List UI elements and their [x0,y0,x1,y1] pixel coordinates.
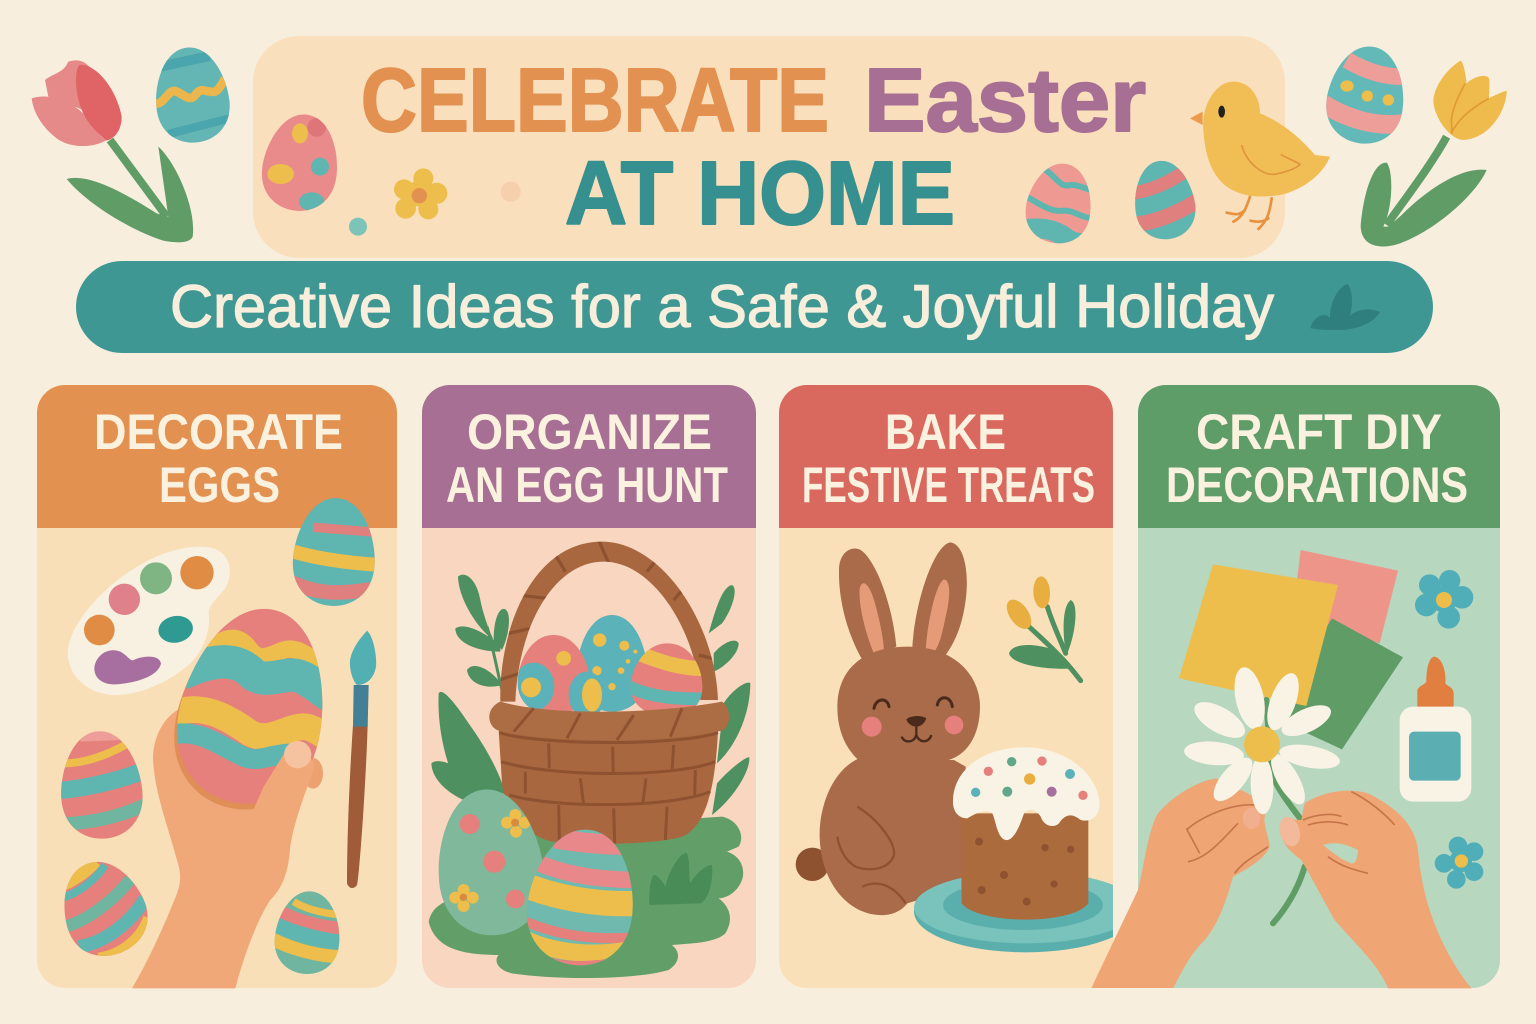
icon: striped egg left [61,731,143,839]
icon: paintbrush [347,631,376,888]
icon: green floral egg [438,790,542,936]
title: AT HOME [565,144,955,244]
panel: craft DIY decorations [1071,385,1500,1024]
heading: bake: BAKE [885,404,1006,460]
decorative dot peach [501,182,521,202]
illustration: decorate eggs [54,490,384,988]
icon: paint palette [68,547,230,695]
icon: pink spotted egg [518,635,588,711]
icon: right tulip [1361,61,1507,246]
heading: decorate eggs: DECORATE [94,404,343,460]
illustration: craft [1091,550,1484,988]
icon: leaf sprig [1310,284,1380,330]
icon: basket handle [499,540,719,702]
icon: small yellow flower [394,168,447,219]
icon: daisy head [1183,664,1342,815]
heading: craft: CRAFT DIY [1196,404,1442,460]
title panel [253,36,1285,258]
decorative dot teal [349,218,367,236]
icon: chick [1190,82,1330,229]
heading: bake [802,404,1095,513]
subtitle banner [76,261,1433,353]
icon: dotted egg [1326,46,1404,144]
icon: egg shadow [160,601,341,823]
title [361,51,1146,244]
icon: wavy egg [1026,164,1090,244]
panel header: egg hunt [422,385,756,528]
icon: chocolate bunny [796,542,980,915]
icon: teal zigzag egg [156,48,230,143]
heading: decorate eggs [94,404,343,513]
heading: egg hunt: AN EGG HUNT [446,457,728,513]
icon: striped egg top [292,498,375,606]
illustration: bake [796,542,1137,952]
subtitle banner: Creative Ideas for a Safe & Joyful Holiday [170,273,1274,340]
icon: striped egg in basket [630,643,702,710]
icon: glue bottle [1400,657,1471,802]
icon: teal speckled egg [580,615,645,712]
panel: decorate eggs [37,385,397,988]
top-left decorations [32,40,521,242]
grass tuft [649,853,712,905]
title: CELEBRATE [361,51,829,151]
heading: egg hunt [446,404,728,513]
icon: large painted egg [176,608,322,804]
icon: left hand [1091,778,1270,988]
icon: striped egg [1135,160,1196,240]
icon: cake on plate [914,747,1113,952]
icon: teal blob with yellow [569,672,605,718]
icon: daisy stem [1266,700,1305,923]
title: Easter [864,51,1146,151]
icon: striped egg lower right [274,891,340,974]
panel header: craft [1138,385,1500,528]
icon: striped foreground egg [527,830,633,966]
heading: craft [1166,404,1468,513]
panel header: bake [779,385,1113,528]
icon: eggs in basket [518,615,702,712]
icon: striped egg lower left [64,862,148,956]
heading: decorate eggs: EGGS [159,457,280,513]
heading: bake: FESTIVE TREATS [802,457,1095,513]
icon: spotted pink egg [262,114,337,211]
icon: blue flower top [1415,570,1473,629]
heading: egg hunt: ORGANIZE [467,404,712,460]
illustration: egg hunt [429,540,750,978]
grass mound [429,817,743,978]
heading: craft: DECORATIONS [1166,457,1468,513]
icon: right hand [1276,791,1471,988]
icon: blue flower bottom [1435,837,1483,889]
icon: left tulip [32,60,193,242]
top-right decorations [1020,40,1507,250]
leaves [431,575,750,815]
icon: flower sprig [1002,576,1081,681]
icon: thumb [250,741,312,823]
icon: coloured paper sheets [1179,550,1403,749]
icon: wicker basket [489,702,729,844]
icon: hand holding egg [132,703,323,988]
panel: bake festive treats [779,385,1137,988]
panel header: decorate eggs [37,385,397,528]
panel: organize an egg hunt [422,385,756,988]
